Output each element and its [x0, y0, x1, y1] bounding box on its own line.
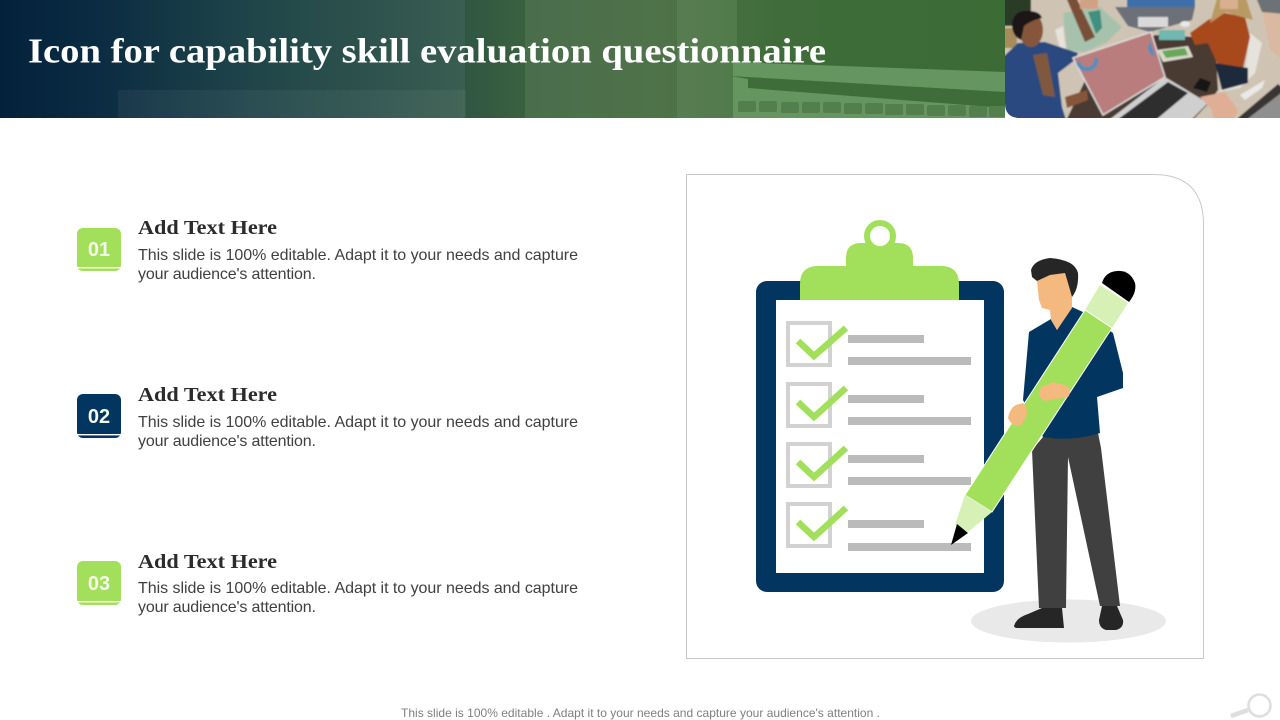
item description: your audience's attention.: [138, 433, 316, 450]
clipboard clip: [800, 243, 959, 300]
item description: your audience's attention.: [138, 266, 316, 283]
banner photo: team around a laptop: [1000, 0, 1280, 123]
slide title: Icon for capability skill evaluation questionnaire: [28, 32, 826, 70]
illustration panel: [686, 174, 1204, 658]
checklist row 2: [788, 384, 971, 426]
number badge 02: 02: [88, 406, 110, 428]
item heading: Add Text Here: [138, 384, 277, 406]
item description: [138, 414, 578, 450]
item description: [138, 247, 578, 283]
number badge 02: [77, 394, 121, 438]
footer note: This slide is 100% editable . Adapt it to your needs and capture your audience's attention .: [401, 706, 880, 720]
trousers: [1032, 433, 1120, 608]
item description: [138, 580, 578, 616]
hair: [1031, 258, 1078, 297]
face and neck: [1037, 273, 1072, 330]
item 01: [77, 217, 578, 283]
item 02: [77, 384, 578, 450]
left hand: [1008, 403, 1027, 426]
icon: person holding pencil: [951, 258, 1166, 642]
pencil: [951, 271, 1135, 545]
shirt: [1023, 307, 1123, 439]
panel frame: [686, 174, 1204, 658]
pencil tip: [951, 524, 968, 545]
checklist row 4: [788, 504, 971, 551]
banner background: [0, 0, 1005, 118]
icon: clipboard checklist: [756, 223, 1004, 592]
item heading: Add Text Here: [138, 551, 277, 573]
icon: magnifier watermark: [1231, 694, 1270, 716]
item heading: Add Text Here: [138, 217, 277, 239]
item 03: [77, 551, 578, 616]
clip ring: [867, 223, 893, 249]
number badge 01: [77, 228, 121, 271]
pencil ferrule: [1085, 285, 1128, 328]
header banner: [0, 0, 1280, 123]
number badge 03: [77, 561, 121, 605]
pencil eraser: [1102, 271, 1135, 302]
left shoe: [1014, 608, 1064, 628]
right shoe: [1099, 606, 1123, 630]
item description: This slide is 100% editable. Adapt it to your needs and capture: [138, 580, 578, 597]
number badge 03: 03: [88, 573, 110, 595]
item description: your audience's attention.: [138, 599, 316, 616]
item description: This slide is 100% editable. Adapt it to your needs and capture: [138, 247, 578, 264]
checklist row 1: [788, 323, 971, 365]
number badge 01: 01: [88, 239, 110, 261]
checklist row 3: [788, 444, 971, 486]
pencil body: [965, 310, 1112, 512]
clipboard board: [756, 281, 1004, 592]
clipboard paper: [776, 300, 984, 573]
pencil cone: [955, 495, 992, 532]
item description: This slide is 100% editable. Adapt it to your needs and capture: [138, 414, 578, 431]
right hand: [1039, 382, 1070, 401]
ground shadow: [971, 600, 1166, 642]
